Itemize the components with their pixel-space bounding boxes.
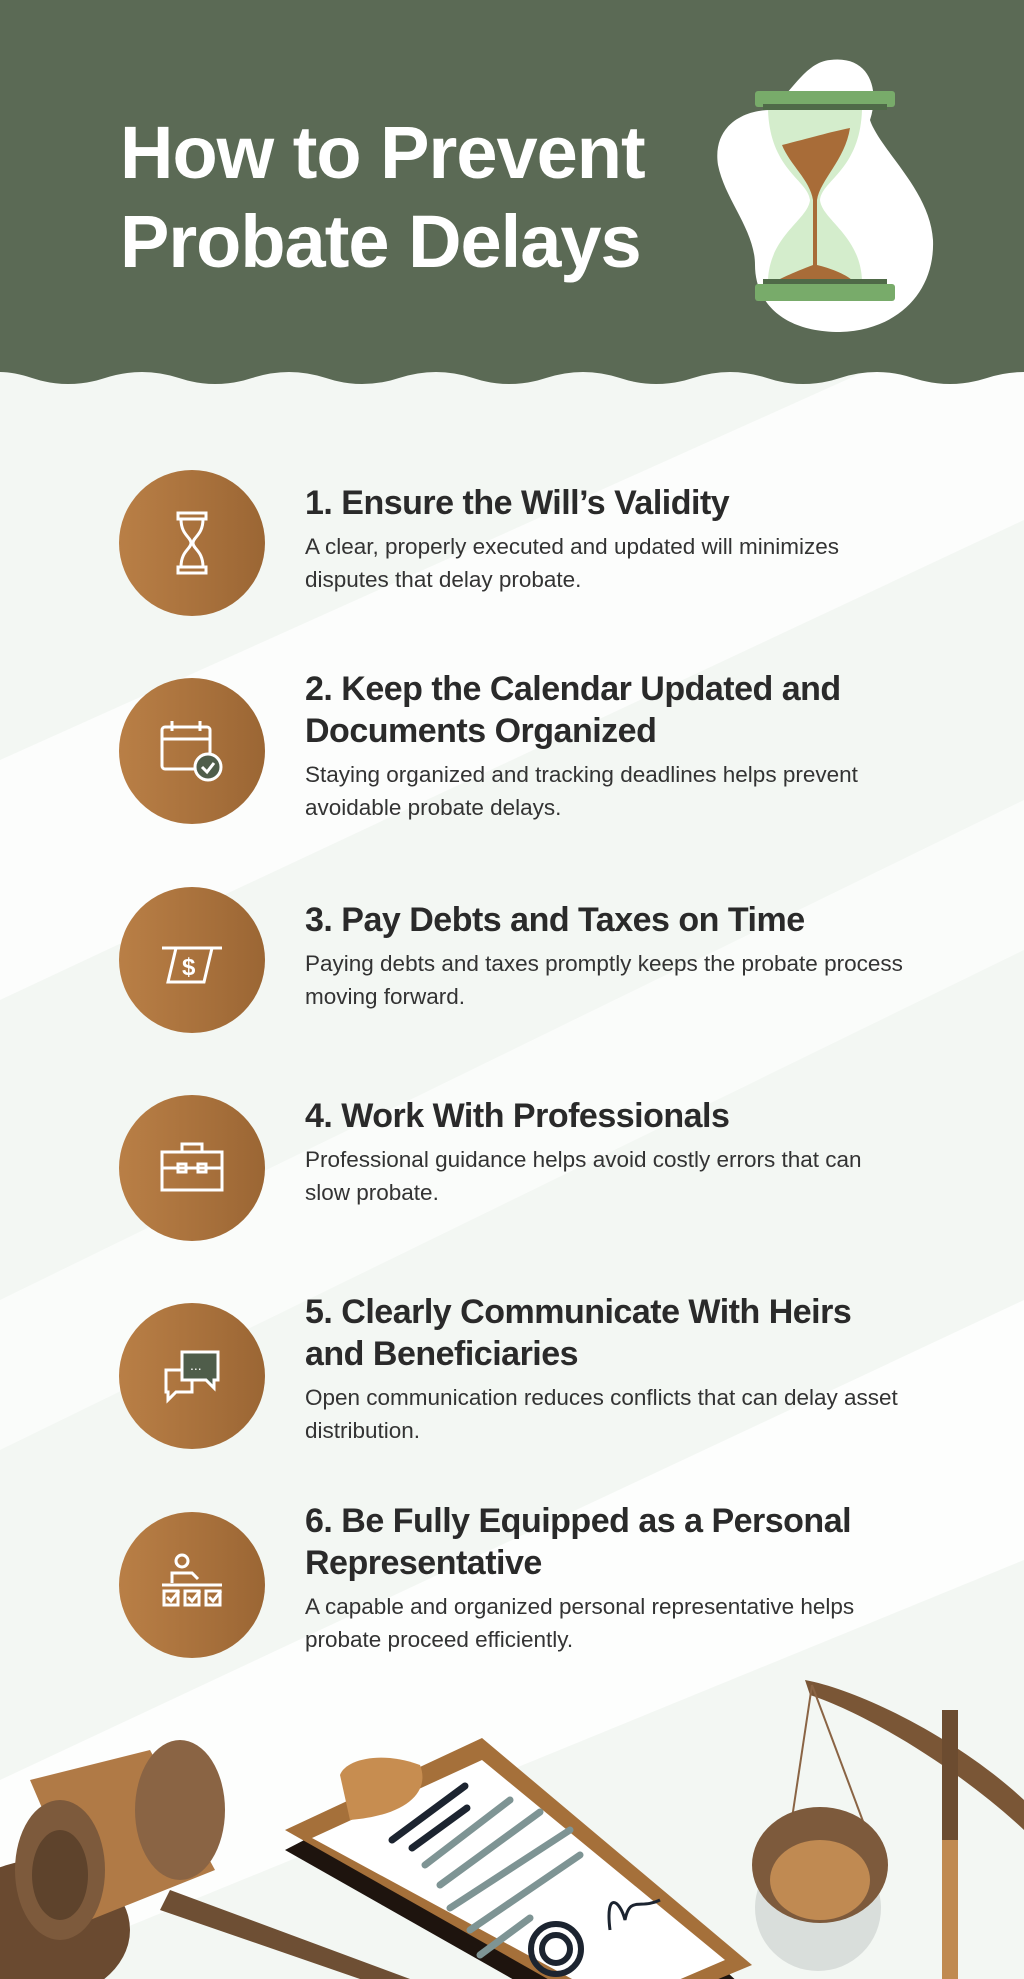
text: step 4: Professional guidance helps avoid costly errors that can slow probate.: [305, 1147, 862, 1205]
text: step 3: 3. Pay Debts and Taxes on Time: [305, 901, 805, 939]
text: step 2: 2. Keep the Calendar Updated and Documents Organized: [305, 670, 841, 750]
step 2: [119, 670, 858, 824]
text: step 6: A capable and organized personal representative helps probate proceed efficiently.: [305, 1594, 854, 1652]
icon: calendar: [119, 678, 265, 824]
text: step 1: A clear, properly executed and updated will minimizes disputes that delay probate.: [305, 534, 839, 592]
icon: bill: $: [182, 954, 196, 981]
text: step 2: Staying organized and tracking deadlines helps prevent avoidable probate delays.: [305, 762, 858, 820]
icon: briefcase: [119, 1095, 265, 1241]
illustration: gavel, clipboard, scales: [0, 1680, 1024, 1979]
icon: bill: [119, 887, 265, 1033]
text: step 3: [305, 901, 903, 1009]
text: step 5: Open communication reduces conflicts that can delay asset distribution.: [305, 1385, 898, 1443]
title: How to Prevent: [120, 111, 645, 194]
clipboard: [285, 1738, 752, 1979]
text: step 2: [305, 670, 858, 820]
text: step 5: [305, 1293, 898, 1443]
header: [0, 0, 1024, 384]
text: step 6: 6. Be Fully Equipped as a Personal Representative: [305, 1502, 851, 1582]
title: [120, 111, 645, 283]
icon: representative: [119, 1512, 265, 1658]
icon: chat: ...: [190, 1357, 202, 1373]
text: step 5: 5. Clearly Communicate With Heirs and Beneficiaries: [305, 1293, 851, 1373]
scales: [752, 1680, 1024, 1979]
gavel: [0, 1740, 410, 1979]
icon: hourglass: [717, 60, 934, 332]
step 5: [119, 1293, 898, 1449]
icon: hourglass circle: [119, 470, 265, 616]
text: step 6: [305, 1502, 854, 1652]
step 4: [119, 1095, 862, 1241]
text: step 1: [305, 484, 839, 592]
step 3: [119, 887, 903, 1033]
text: step 4: 4. Work With Professionals: [305, 1097, 729, 1135]
text: step 3: Paying debts and taxes promptly keeps the probate process moving forward.: [305, 951, 903, 1009]
title: Probate Delays: [120, 200, 641, 283]
step 1: [119, 470, 839, 616]
text: step 1: 1. Ensure the Will’s Validity: [305, 484, 729, 522]
icon: chat: [119, 1303, 265, 1449]
text: step 4: [305, 1097, 862, 1205]
step 6: [119, 1502, 854, 1658]
